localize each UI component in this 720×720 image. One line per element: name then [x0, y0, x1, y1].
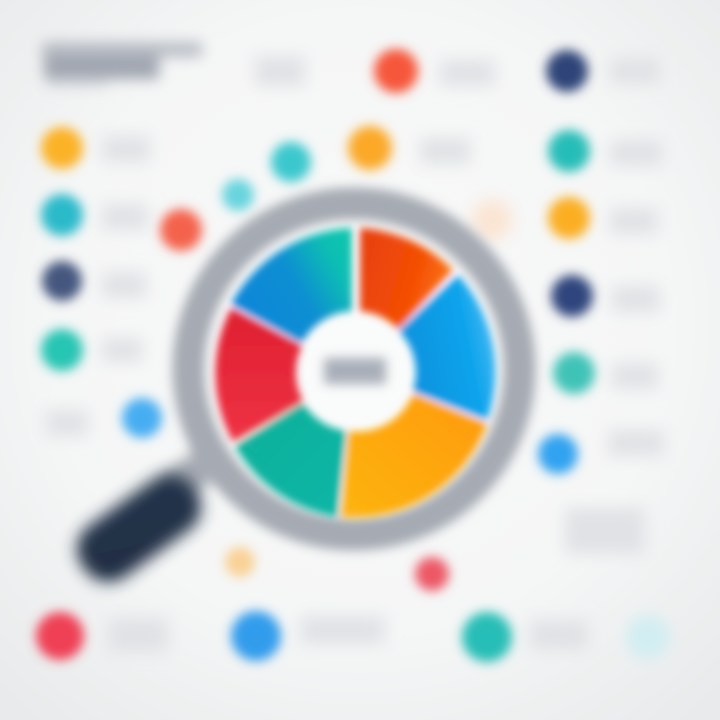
segment: orange bottom [341, 394, 487, 517]
center label [324, 358, 386, 384]
icon: right column teal dot [548, 130, 590, 172]
icon: bottom blue dot [231, 611, 281, 661]
icon: left column orange dot [41, 127, 83, 169]
segment: orange red [360, 228, 453, 329]
icon: bottom teal dot [462, 612, 512, 662]
icon: left column navy dot [42, 261, 82, 301]
icon: orbit red dot [160, 209, 202, 251]
icon: left blue dot [122, 398, 162, 438]
icon: top right navy dot [546, 50, 588, 92]
segment: red left [215, 308, 303, 442]
magnifier ring [189, 204, 519, 534]
icon: left column green-teal dot [41, 329, 83, 371]
icon: left column teal dot [41, 194, 83, 236]
handle grip [66, 463, 212, 593]
magnifying glass [66, 204, 519, 593]
icon: pale peach dot [472, 200, 512, 240]
title block [42, 42, 202, 87]
icon: right column orange dot [548, 197, 590, 239]
handle connector shadow [161, 441, 229, 503]
icon: right column blue dot [538, 434, 578, 474]
icon: small red dot [415, 557, 449, 591]
icon: right column teal dot lower [553, 352, 595, 394]
magnifier handle [66, 441, 229, 593]
icon: orbit small teal dot [222, 179, 254, 211]
icon: right column navy dot [551, 275, 593, 317]
icon: small peach dot [225, 547, 255, 577]
icon: orbit orange dot [348, 126, 392, 170]
donut chart [215, 228, 495, 517]
segment: blue and teal top [231, 228, 352, 343]
segment: teal bottom [235, 403, 346, 517]
icon: bottom crimson dot [36, 612, 84, 660]
icon: bottom pale teal dot [626, 615, 670, 659]
icon: top row red dot [374, 49, 418, 93]
icon: orbit teal dot [271, 142, 311, 182]
blurred text labels [46, 56, 664, 652]
segment: blue right [399, 275, 495, 420]
